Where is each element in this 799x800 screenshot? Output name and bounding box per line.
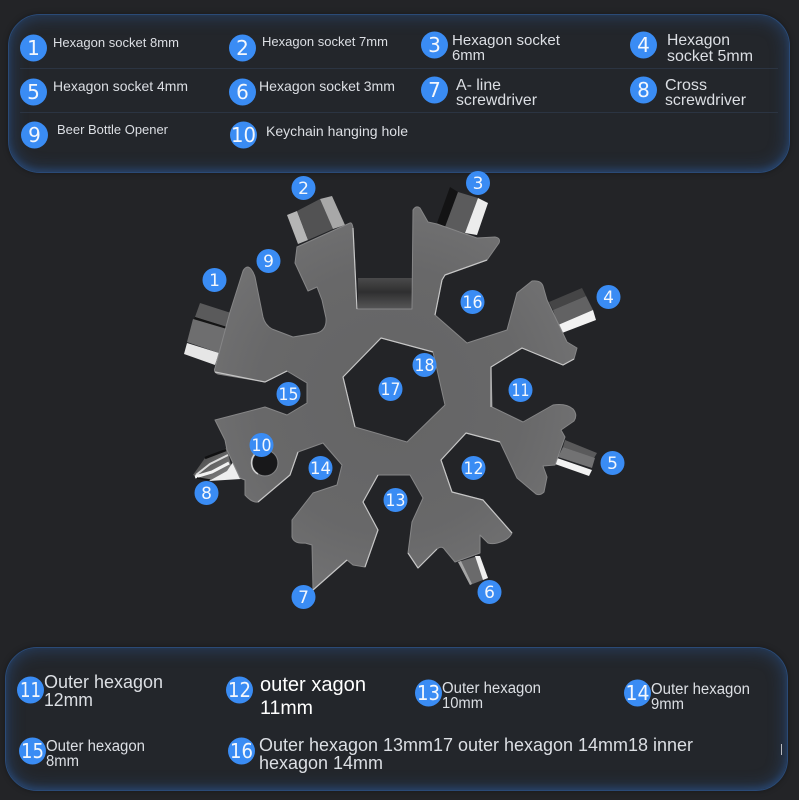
callout 13: 13 <box>386 491 406 511</box>
legend item 1 <box>20 34 179 62</box>
legend item 8 <box>630 76 747 109</box>
legend item 16 <box>228 734 693 773</box>
bit 2: hexagon socket 7mm <box>287 196 345 244</box>
legend item 15: Outer hexagon <box>46 738 145 755</box>
legend item 3: 3 <box>428 33 441 57</box>
callout 1: 1 <box>209 271 220 291</box>
bit 8: cross screwdriver <box>193 448 241 481</box>
legend item 9: Beer Bottle Opener <box>57 122 169 137</box>
legend item 14 <box>624 680 750 713</box>
legend item 6 <box>229 78 395 106</box>
legend item 13: 13 <box>417 681 440 705</box>
legend item 13: 10mm <box>442 695 483 712</box>
legend item 6: 6 <box>236 80 249 104</box>
legend item 7: A- line <box>456 77 501 94</box>
legend item 14: 14 <box>626 681 650 705</box>
callout 2 <box>292 176 316 200</box>
legend item 9 <box>21 122 169 148</box>
legend item 15: 15 <box>21 739 44 763</box>
legend item 4: socket 5mm <box>667 48 753 65</box>
legend item 3: Hexagon socket <box>452 32 561 49</box>
legend item 12 <box>226 674 366 719</box>
legend item 10 <box>230 122 408 148</box>
legend item 10: Keychain hanging hole <box>266 123 408 139</box>
legend item 15 <box>19 738 145 770</box>
callout 11: 11 <box>512 381 530 401</box>
callout 6: 6 <box>484 583 495 603</box>
legend item 6: Hexagon socket 3mm <box>259 78 395 94</box>
legend item 1: 1 <box>27 36 40 60</box>
callout 9: 9 <box>263 252 274 272</box>
legend item 8: Cross <box>665 77 707 94</box>
handle bar between the top arms <box>358 278 412 309</box>
legend item 14: Outer hexagon <box>651 681 750 698</box>
legend item 8: screwdriver <box>665 92 747 109</box>
legend item 3: 6mm <box>452 47 485 64</box>
legend item 10: 10 <box>231 123 256 147</box>
legend item 4: 4 <box>637 33 650 57</box>
callout numbers on the tool <box>194 171 624 609</box>
callout 3 <box>466 171 490 195</box>
legend item 16: 16 <box>230 739 253 763</box>
callout 7: 7 <box>298 588 309 608</box>
legend item 2: Hexagon socket 7mm <box>262 34 388 49</box>
panel: tool functions 1 to 10 <box>8 14 790 173</box>
legend item 1: Hexagon socket 8mm <box>53 35 179 50</box>
callout 6 <box>478 580 502 604</box>
callout 17: 17 <box>380 380 400 400</box>
legend item 7: 7 <box>428 78 441 102</box>
legend item 7: screwdriver <box>456 92 538 109</box>
callout 12: 12 <box>464 459 484 479</box>
bit 6: hexagon socket 3mm <box>458 556 488 585</box>
callout 10: 10 <box>252 436 272 456</box>
legend item 15: 8mm <box>46 753 79 770</box>
callout 5 <box>600 451 624 475</box>
callout 4 <box>596 285 620 309</box>
legend item 2 <box>229 34 388 62</box>
legend item 12: 11mm <box>260 697 313 719</box>
legend item 11: 11 <box>20 678 41 702</box>
tool body with hexagon cut-outs <box>214 207 577 590</box>
legend item 5: 5 <box>27 80 40 104</box>
legend item 4 <box>630 32 753 65</box>
legend item 14: 9mm <box>651 696 684 713</box>
legend item 8: 8 <box>637 78 650 102</box>
legend item 5: Hexagon socket 4mm <box>53 78 188 94</box>
callout 1 <box>202 268 226 292</box>
bit 5: hexagon socket 4mm <box>555 440 597 476</box>
legend item 13: Outer hexagon <box>442 680 541 697</box>
callout 15: 15 <box>278 385 298 405</box>
callout 5: 5 <box>607 454 618 474</box>
legend item 12: 12 <box>228 678 251 702</box>
bit 1: hexagon socket 8mm <box>184 303 231 365</box>
bit 4: hexagon socket 5mm <box>549 288 596 333</box>
callout 18: 18 <box>414 356 434 376</box>
legend item 3 <box>421 32 561 64</box>
callout 4: 4 <box>603 288 614 308</box>
callout 9 <box>256 249 280 273</box>
legend item 4: Hexagon <box>667 32 730 49</box>
callout 2: 2 <box>298 179 309 199</box>
snowflake multi-tool <box>184 187 597 590</box>
callout 7 <box>292 585 316 609</box>
light edge highlights <box>215 228 574 590</box>
legend item 16: Outer hexagon 13mm17 outer hexagon 14mm18 inner <box>259 734 693 755</box>
callout 16: 16 <box>462 293 482 313</box>
callout 14: 14 <box>310 459 331 479</box>
legend item 11: 12mm <box>44 689 93 710</box>
legend item 7 <box>421 76 538 109</box>
legend item 11: Outer hexagon <box>44 671 163 692</box>
callout 3: 3 <box>473 174 483 194</box>
legend item 12: outer xagon <box>260 674 366 696</box>
legend item 11 <box>17 671 163 710</box>
callout 8 <box>194 481 218 505</box>
legend item 16: hexagon 14mm <box>259 752 383 773</box>
legend item 5 <box>20 78 188 106</box>
legend item 2: 2 <box>236 36 249 60</box>
callout 8: 8 <box>201 484 212 504</box>
bit 3: hexagon socket 6mm <box>437 187 488 235</box>
legend item 13 <box>415 680 541 712</box>
panel: outer and inner hexagon sizes 11 to 18 <box>5 647 788 791</box>
legend item 9: 9 <box>28 123 41 147</box>
keychain hole rim <box>252 451 277 475</box>
